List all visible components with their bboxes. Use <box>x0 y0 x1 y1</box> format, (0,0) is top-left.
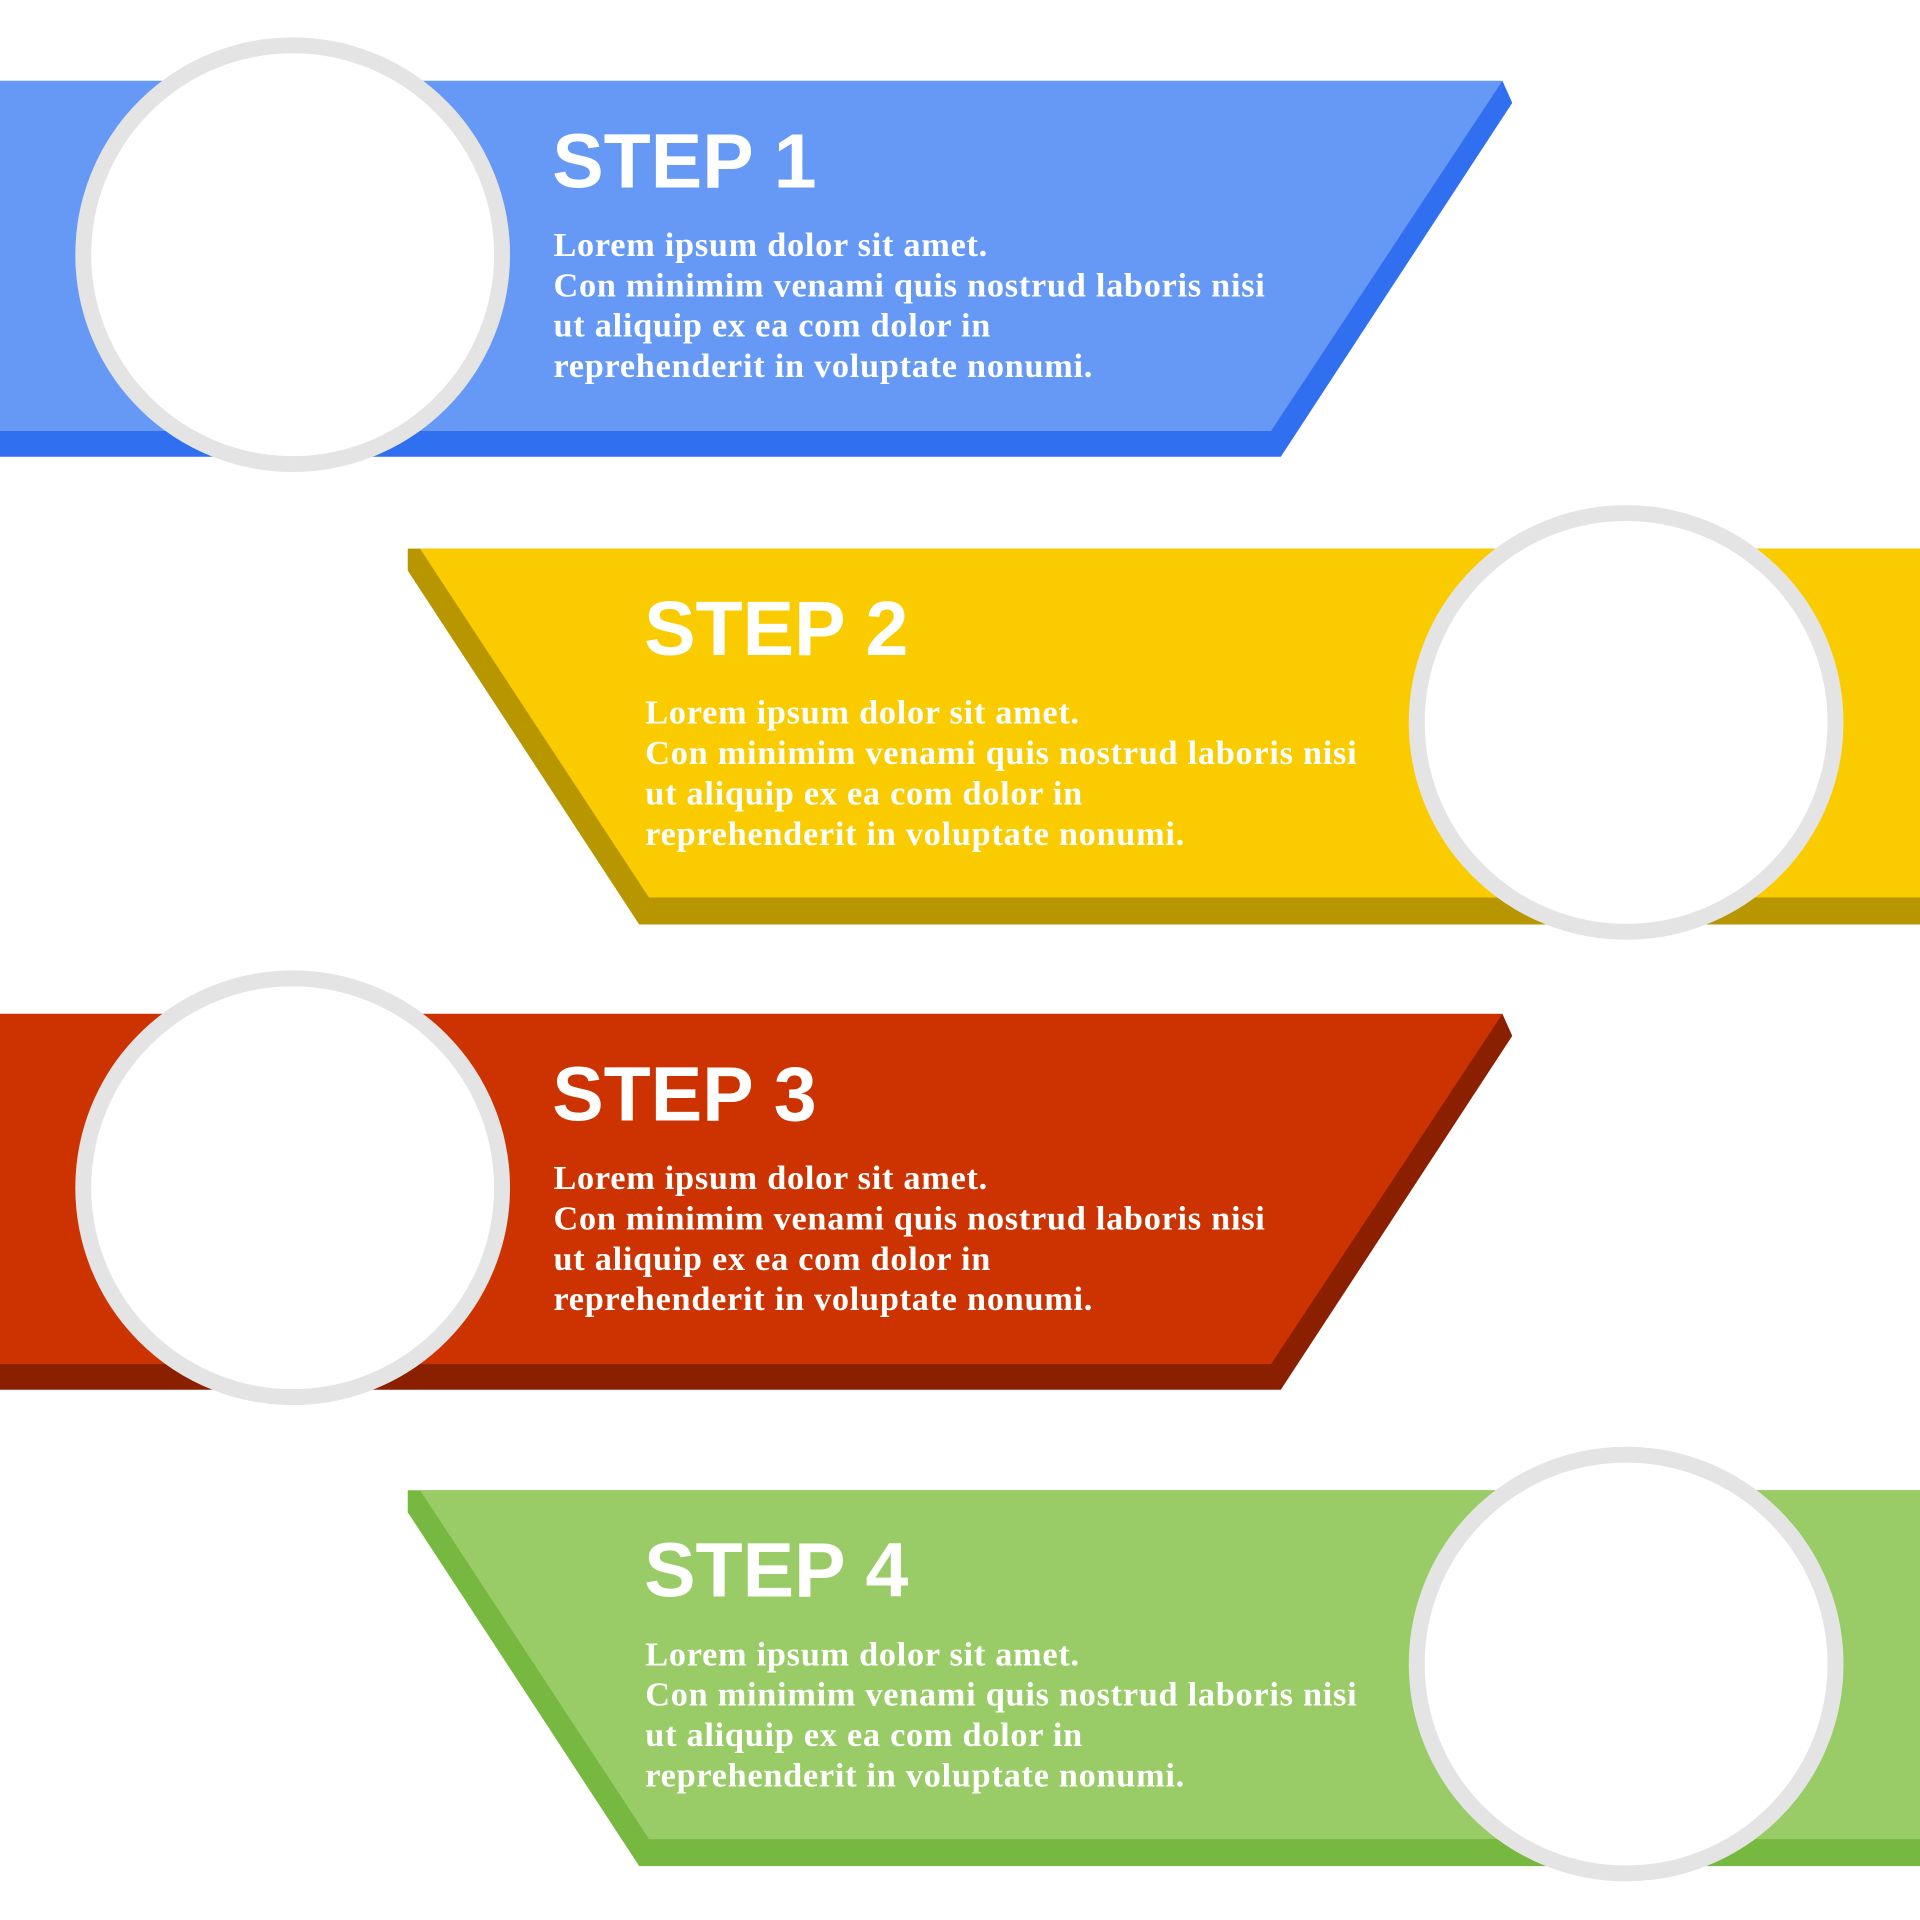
icon: circle 4 <box>1417 1455 1836 1873</box>
text: step 1 body: Con minimim venami quis nostrud laboris nisi <box>553 266 1266 304</box>
panel: step 3 <box>0 978 1512 1397</box>
text: step 4 body: Con minimim venami quis nostrud laboris nisi <box>645 1676 1357 1714</box>
text: step 4 body: reprehenderit in voluptate nonumi. <box>645 1757 1185 1795</box>
panel: step 1 <box>0 45 1512 464</box>
text: step 3 body: Lorem ipsum dolor sit amet. <box>553 1159 988 1197</box>
icon: circle 1 <box>83 45 502 464</box>
heading: step 4: STEP 4 <box>644 1528 909 1614</box>
text: step 4 body: ut aliquip ex ea com dolor in <box>645 1716 1083 1754</box>
panel: step 2 <box>408 513 1920 932</box>
text: step 4 body: Lorem ipsum dolor sit amet. <box>645 1635 1080 1673</box>
text: step 3 body: reprehenderit in voluptate nonumi. <box>553 1280 1093 1318</box>
text: step 2 body: reprehenderit in voluptate nonumi. <box>645 815 1185 853</box>
icon: circle 3 <box>83 978 502 1397</box>
text: step 3 body: ut aliquip ex ea com dolor in <box>553 1240 991 1278</box>
panel: step 4 <box>408 1455 1920 1873</box>
heading: step 2: STEP 2 <box>644 586 908 672</box>
icon: circle 2 <box>1417 513 1836 932</box>
text: step 2 body: Con minimim venami quis nostrud laboris nisi <box>645 734 1357 772</box>
text: step 1 body: Lorem ipsum dolor sit amet. <box>553 226 988 264</box>
heading: step 1: STEP 1 <box>552 118 817 204</box>
text: step 1 body: ut aliquip ex ea com dolor in <box>553 307 991 345</box>
text: step 2 body: Lorem ipsum dolor sit amet. <box>645 694 1080 732</box>
text: step 3 body: Con minimim venami quis nostrud laboris nisi <box>553 1199 1266 1237</box>
text: step 2 body: ut aliquip ex ea com dolor in <box>645 774 1083 812</box>
text: step 1 body: reprehenderit in voluptate nonumi. <box>553 347 1093 385</box>
heading: step 3: STEP 3 <box>552 1051 817 1137</box>
